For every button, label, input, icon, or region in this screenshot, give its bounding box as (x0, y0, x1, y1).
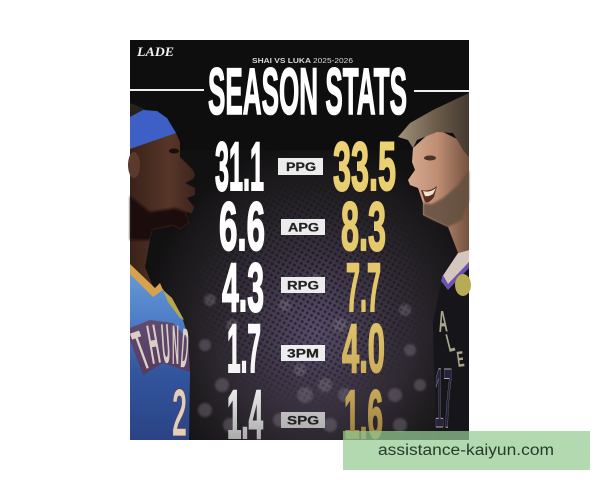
smile (421, 186, 437, 202)
text: 8.3 (341, 188, 386, 265)
teeth (423, 188, 436, 196)
left player: Shai: N (172, 313, 179, 376)
headband (130, 110, 176, 149)
watermark banner (343, 431, 590, 470)
collar trim (130, 264, 163, 297)
3PM label: 3PM (287, 346, 319, 360)
neck and face (130, 130, 195, 292)
watermark text: assistance-kaiyun.com (378, 442, 554, 459)
title rule left (130, 89, 204, 91)
hair (398, 93, 469, 157)
gold shoulder trim (163, 290, 184, 320)
left player: Shai (126, 103, 195, 451)
left player: Shai: 2 (172, 375, 187, 451)
jersey (433, 262, 469, 440)
beard (423, 170, 469, 227)
team logo (455, 274, 471, 296)
SPG label: SPG (287, 414, 319, 428)
PPG label: PPG (286, 160, 316, 174)
ear (128, 152, 140, 178)
text: 17 (435, 351, 452, 445)
SPG label (281, 412, 325, 428)
jersey lettering: THUNDER: H (143, 312, 164, 376)
row: SPG (227, 376, 383, 453)
clean edge below photo (130, 440, 469, 460)
RPG label (281, 277, 325, 293)
subtitle: SHAI VS LUKA 2025-2026 (252, 58, 353, 65)
logo: LADE: LADE (136, 44, 174, 59)
row: PPG: 31.1 (215, 128, 264, 205)
RPG label: RPG (287, 278, 319, 292)
text: 4.0 (342, 310, 385, 387)
hair (130, 103, 146, 117)
jersey lettering: THUNDER: T (126, 319, 157, 381)
neck and face (408, 128, 469, 253)
text: 33.5 (333, 128, 396, 205)
row: RPG: 4.3 (222, 249, 264, 326)
PPG label (278, 158, 323, 175)
3PM label (281, 345, 325, 361)
jersey lettering: THUNDER: U (159, 312, 172, 375)
APG label: APG (288, 220, 319, 234)
row: RPG (222, 249, 381, 326)
eye (424, 156, 436, 160)
row: 3PM (227, 310, 385, 387)
title rule right (414, 90, 469, 92)
background panel (130, 40, 469, 440)
jersey lettering: E (455, 346, 466, 372)
row: 3PM: 1.7 (227, 310, 261, 387)
jersey lettering (437, 305, 466, 372)
row: APG (219, 188, 386, 265)
row: APG: 6.6 (219, 188, 265, 265)
jersey (130, 268, 190, 440)
jersey lettering: L (443, 327, 457, 358)
crowd background (164, 158, 456, 440)
APG label (281, 219, 325, 235)
text: 1.6 (344, 376, 383, 453)
lettering band (130, 320, 190, 375)
collar (441, 262, 469, 290)
row: SPG: 1.4 (227, 376, 263, 453)
beard shadow (130, 196, 190, 240)
eye (169, 148, 179, 154)
jersey lettering: A (437, 305, 448, 339)
undershirt V (442, 250, 469, 286)
text: D (179, 316, 191, 379)
text: 7.7 (346, 249, 381, 326)
right player: Luka (398, 93, 471, 445)
